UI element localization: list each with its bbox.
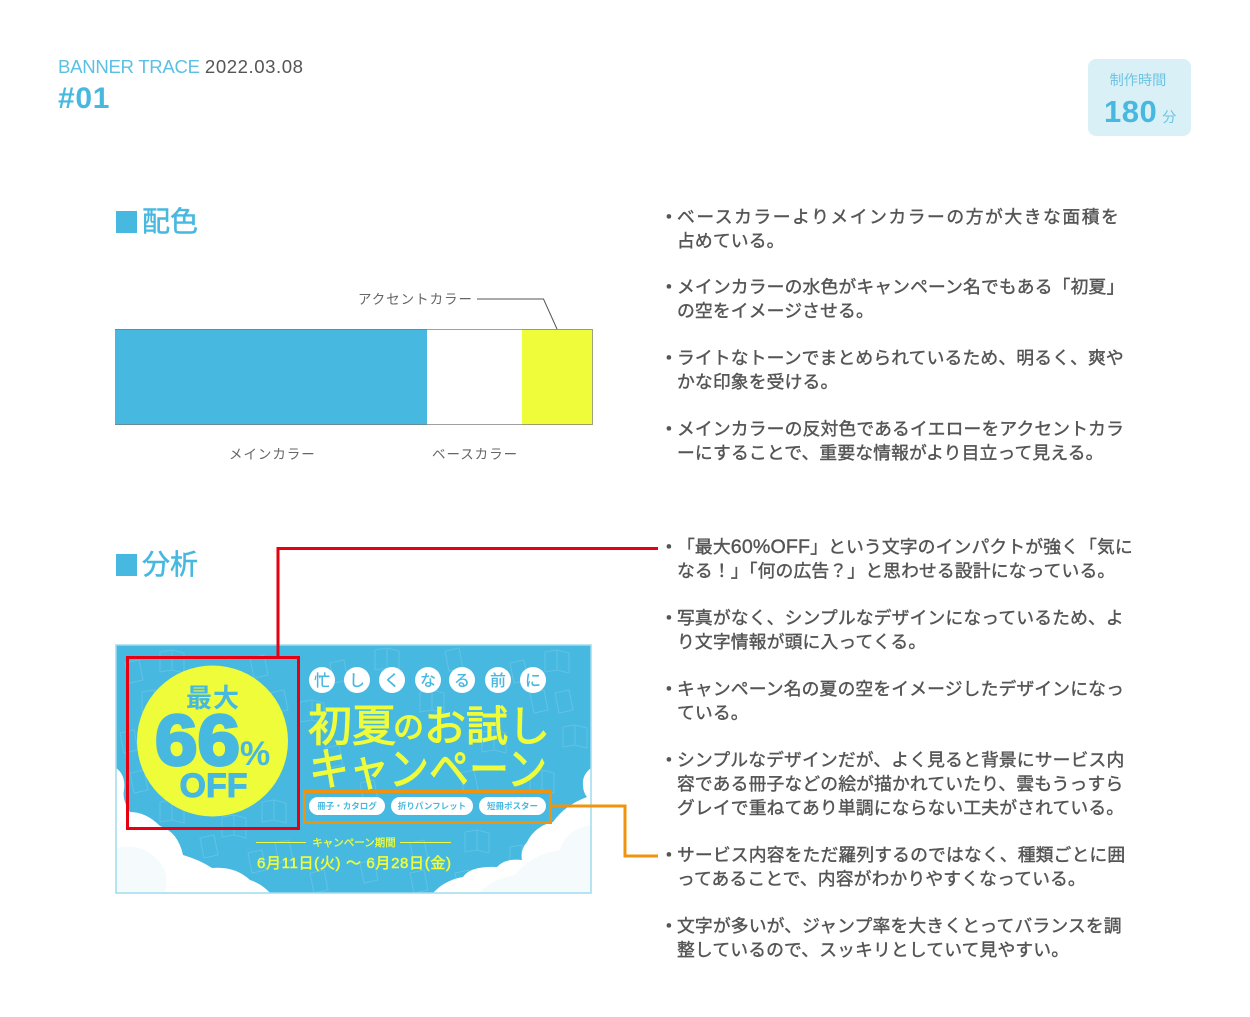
text block: analysis notes 2: り文字情報が頭に入ってくる。 [677, 632, 926, 652]
heading: colour scheme: 配色 [142, 206, 198, 237]
heading: analysis: 分析 [142, 549, 198, 580]
discount badge: 66 [155, 702, 240, 781]
clouds [116, 768, 591, 893]
text block: colour notes 1 [660, 207, 1120, 251]
discount badge [137, 666, 288, 816]
caption: accent colour: アクセントカラー [358, 292, 473, 307]
text block: analysis notes 1: なる！」「何の広告？」と思わせる設計になっている。 [677, 561, 1115, 581]
text block: analysis notes 5: ・ [660, 845, 678, 865]
campaign title [308, 702, 550, 795]
badge value: 180 分 [1104, 94, 1176, 129]
text block: colour notes 4: ーにすることで、重要な情報がより目立って見える。 [677, 443, 1104, 463]
text block: colour notes 3: ライトなトーンでまとめられているため、明るく、爽や [677, 348, 1124, 368]
discount badge: OFF [180, 767, 247, 805]
header: series title and date: BANNER TRACE 2022.03.08 [58, 56, 303, 77]
campaign title: お試し [424, 703, 550, 750]
text block: colour notes 4 [660, 419, 1124, 463]
text block: analysis notes 1: 「最大60%OFF」という文字のインパクトが強く「気に [677, 536, 1133, 558]
red callout: discount badge [128, 548, 658, 828]
tagline circles [309, 667, 546, 693]
tagline circles: る [454, 673, 470, 690]
text block: analysis notes 4: ・ [660, 750, 678, 770]
text block: analysis notes 2: 写真がなく、シンプルなデザインになっているため、よ [677, 608, 1124, 628]
text block: analysis notes 6: 文字が多いが、ジャンプ率を大きくとってバランスを調 [677, 916, 1122, 936]
text block: analysis notes 6: 整しているので、スッキリとしていて見やすい。 [677, 940, 1069, 960]
text block: analysis notes 3 [660, 679, 1124, 723]
service pills: 短冊ポスター [487, 801, 538, 811]
campaign period: 6月11日(火) ～ 6月28日(金) [257, 855, 451, 872]
tagline circles: 前 [490, 672, 506, 690]
text block: colour notes 4: ・ [660, 419, 678, 439]
campaign title: キャンペーン [309, 744, 547, 795]
badge: production time [1088, 59, 1191, 136]
text block: analysis notes 5 [660, 845, 1125, 889]
tagline circles: に [525, 673, 541, 690]
text block: analysis notes 1 [660, 536, 1133, 581]
campaign period [256, 837, 451, 872]
banner reproduction [115, 644, 592, 894]
text block: analysis notes 4 [660, 750, 1124, 818]
text block: colour notes 2: メインカラーの水色がキャンペーン名でもある「初夏」 [677, 277, 1124, 297]
orange callout: service pills [304, 792, 658, 856]
text block: colour notes 1: ベースカラーよりメインカラーの方が大きな面積を [677, 207, 1120, 227]
text block: colour notes 2: の空をイメージさせる。 [677, 301, 874, 321]
text block: analysis notes 6: ・ [660, 916, 678, 936]
heading: colour scheme [116, 206, 198, 237]
text block: analysis notes 5: サービス内容をただ羅列するのではなく、種類ごとに囲 [677, 845, 1125, 865]
text block: analysis notes 2 [660, 608, 1124, 652]
colour proportion bar [115, 298, 593, 425]
text block: analysis notes 4: シンプルなデザインだが、よく見ると背景にサービス内 [677, 750, 1124, 770]
text block: analysis notes 6 [660, 916, 1122, 960]
text block: colour notes 2 [660, 277, 1124, 321]
caption: main colour: メインカラー [229, 447, 316, 462]
tagline circles: な [420, 672, 436, 690]
background pattern [120, 648, 587, 893]
tagline circles: く [384, 673, 400, 690]
text block: analysis notes 2: ・ [660, 608, 678, 628]
discount badge: 最大 [186, 683, 240, 713]
service pills [309, 797, 546, 815]
text block: colour notes 1: 占めている。 [677, 231, 785, 251]
text block: analysis notes 3: ・ [660, 679, 678, 699]
text block: colour notes 2: ・ [660, 277, 678, 297]
badge label: 制作時間 [1110, 73, 1166, 89]
campaign title: 初夏 [308, 702, 396, 751]
text block: colour notes 4: メインカラーの反対色であるイエローをアクセントカラ [677, 419, 1124, 439]
text block: analysis notes 3: ている。 [677, 703, 749, 723]
text block: colour notes 3: ・ [660, 348, 678, 368]
campaign title: の [393, 710, 424, 745]
service pills: 冊子・カタログ [317, 801, 377, 811]
text block: colour notes 1: ・ [660, 207, 678, 227]
tagline circles: し [349, 673, 365, 690]
text block: analysis notes 1: ・ [660, 537, 678, 557]
text block: colour notes 3 [660, 348, 1124, 392]
service pills: 折りパンフレット [398, 801, 466, 811]
tagline circles: 忙 [314, 672, 330, 690]
text block: analysis notes 3: キャンペーン名の夏の空をイメージしたデザインになっ [677, 679, 1124, 699]
discount badge: % [240, 735, 270, 773]
caption: base colour: ベースカラー [432, 447, 518, 462]
heading: analysis [116, 549, 198, 580]
text block: colour notes 3: かな印象を受ける。 [677, 372, 838, 392]
text block: analysis notes 5: ってあることで、内容がわかりやすくなっている。 [677, 869, 1086, 889]
text block: analysis notes 4: 容である冊子などの絵が描かれていたり、雲もうっすら [677, 774, 1123, 794]
text block: analysis notes 4: グレイで重ねてあり単調にならない工夫がされている。 [677, 798, 1124, 818]
campaign period: キャンペーン期間 [312, 837, 396, 849]
header: issue number: #01 [58, 82, 110, 115]
